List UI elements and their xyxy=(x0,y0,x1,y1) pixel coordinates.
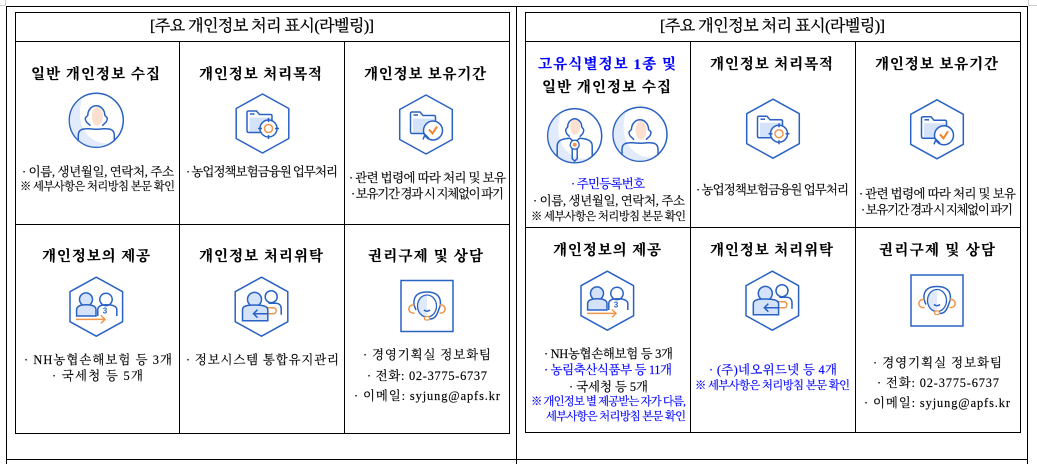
cell: unique identifier and general collection: · 이름, 생년월일, 연락처, 주소 xyxy=(533,193,685,208)
icon: person xyxy=(613,107,667,161)
icon: headset xyxy=(911,275,963,326)
cell: unique identifier and general collection: · 주민등록번호 xyxy=(571,176,645,191)
icon: folder target xyxy=(747,99,799,158)
panel: right label table xyxy=(526,12,1020,432)
cell: retention period xyxy=(349,65,506,201)
cell: general collection: 일반 개인정보 수집 xyxy=(31,65,160,83)
cell: third party provision: 세부사항은 처리방침 본문 확인 xyxy=(546,409,686,423)
cell: processing purpose: · 농업정책보험금융원 업무처리 xyxy=(186,164,338,179)
icon: folder target xyxy=(236,94,289,153)
cell: remedy and consultation: · 전화: 02-3775-6737 xyxy=(367,368,487,383)
cell: processing purpose xyxy=(696,55,849,197)
cell: third party provision: 개인정보의 제공 xyxy=(42,247,150,265)
cell: processing purpose: 개인정보 처리목적 xyxy=(199,65,322,83)
cell: entrustment xyxy=(695,241,850,392)
cell: third party provision: · NH농협손해보험 등 3개 xyxy=(544,346,673,361)
cell: remedy and consultation: 권리구제 및 상담 xyxy=(368,247,483,265)
cell: remedy and consultation: · 이메일: syjung@apfs.kr xyxy=(864,395,1011,410)
icon: provision xyxy=(581,271,634,330)
cell: retention period xyxy=(859,55,1016,217)
cell: third party provision: · 국세청 등 5개 xyxy=(569,379,648,394)
cell: unique identifier and general collection xyxy=(531,55,686,223)
title: right table: [주요 개인정보 처리 표시(라벨링)] xyxy=(660,16,885,35)
cell: remedy and consultation: · 경영기획실 정보화팀 xyxy=(873,355,1002,370)
cell: entrustment: · (주)네오위드넷 등 4개 xyxy=(709,362,837,377)
cell: third party provision: · 국세청 등 5개 xyxy=(52,368,143,383)
cell: third party provision: ※ 개인정보 별 제공받는 자가 다름, xyxy=(531,394,686,408)
icon: headset xyxy=(401,280,453,332)
cell: processing purpose xyxy=(186,65,338,179)
icon: person with key xyxy=(548,109,602,163)
cell: third party provision xyxy=(24,247,172,383)
title: left table: [주요 개인정보 처리 표시(라벨링)] xyxy=(150,16,374,35)
cell: third party provision xyxy=(531,241,686,423)
cell: retention period: 개인정보 보유기간 xyxy=(875,55,998,73)
cell: remedy and consultation: · 전화: 02-3775-6737 xyxy=(877,375,999,390)
cell: remedy and consultation xyxy=(354,247,501,403)
cell: unique identifier and general collection: 고유식별정보 1종 및 xyxy=(538,55,676,73)
cell: retention period: · 보유기간 경과 시 지체없이 파기 xyxy=(351,186,504,201)
icon: entrustment xyxy=(746,271,799,330)
icon: provision xyxy=(70,277,123,336)
cell: general collection xyxy=(20,65,175,193)
cell: retention period: 개인정보 보유기간 xyxy=(364,65,486,83)
cell: retention period: · 관련 법령에 따라 처리 및 보유 xyxy=(349,170,506,185)
cell: remedy and consultation: 권리구제 및 상담 xyxy=(879,241,995,259)
cell: remedy and consultation: · 이메일: syjung@apfs.kr xyxy=(354,388,501,403)
cell: third party provision: · NH농협손해보험 등 3개 xyxy=(24,352,172,367)
icon: folder clock xyxy=(911,100,963,159)
cell: retention period: · 보유기간 경과 시 지체없이 파기 xyxy=(861,202,1013,217)
cell: processing purpose: · 농업정책보험금융원 업무처리 xyxy=(696,182,849,197)
cell: general collection: ※ 세부사항은 처리방침 본문 확인 xyxy=(20,179,175,193)
cell: remedy and consultation xyxy=(864,241,1011,410)
cell: retention period: · 관련 법령에 따라 처리 및 보유 xyxy=(859,186,1016,201)
cell: unique identifier and general collection: ※ 세부사항은 처리방침 본문 확인 xyxy=(531,209,686,223)
cell: entrustment xyxy=(186,247,339,367)
cell: entrustment: 개인정보 처리위탁 xyxy=(710,241,833,259)
icon: entrustment xyxy=(235,277,288,336)
cell: third party provision: · 농림축산식품부 등 11개 xyxy=(544,362,672,377)
cell: remedy and consultation: · 경영기획실 정보화팀 xyxy=(363,347,491,362)
icon: person xyxy=(69,93,123,147)
cell: entrustment: 개인정보 처리위탁 xyxy=(199,247,323,265)
cell: entrustment: · 정보시스템 통합유지관리 xyxy=(186,352,339,367)
icon: folder clock xyxy=(400,95,452,154)
cell: third party provision: 개인정보의 제공 xyxy=(553,241,661,259)
panel: left label table xyxy=(16,12,510,434)
cell: processing purpose: 개인정보 처리목적 xyxy=(710,55,833,73)
cell: unique identifier and general collection: 일반 개인정보 수집 xyxy=(542,78,671,96)
cell: entrustment: ※ 세부사항은 처리방침 본문 확인 xyxy=(695,378,850,392)
cell: general collection: · 이름, 생년월일, 연락처, 주소 xyxy=(22,164,174,179)
